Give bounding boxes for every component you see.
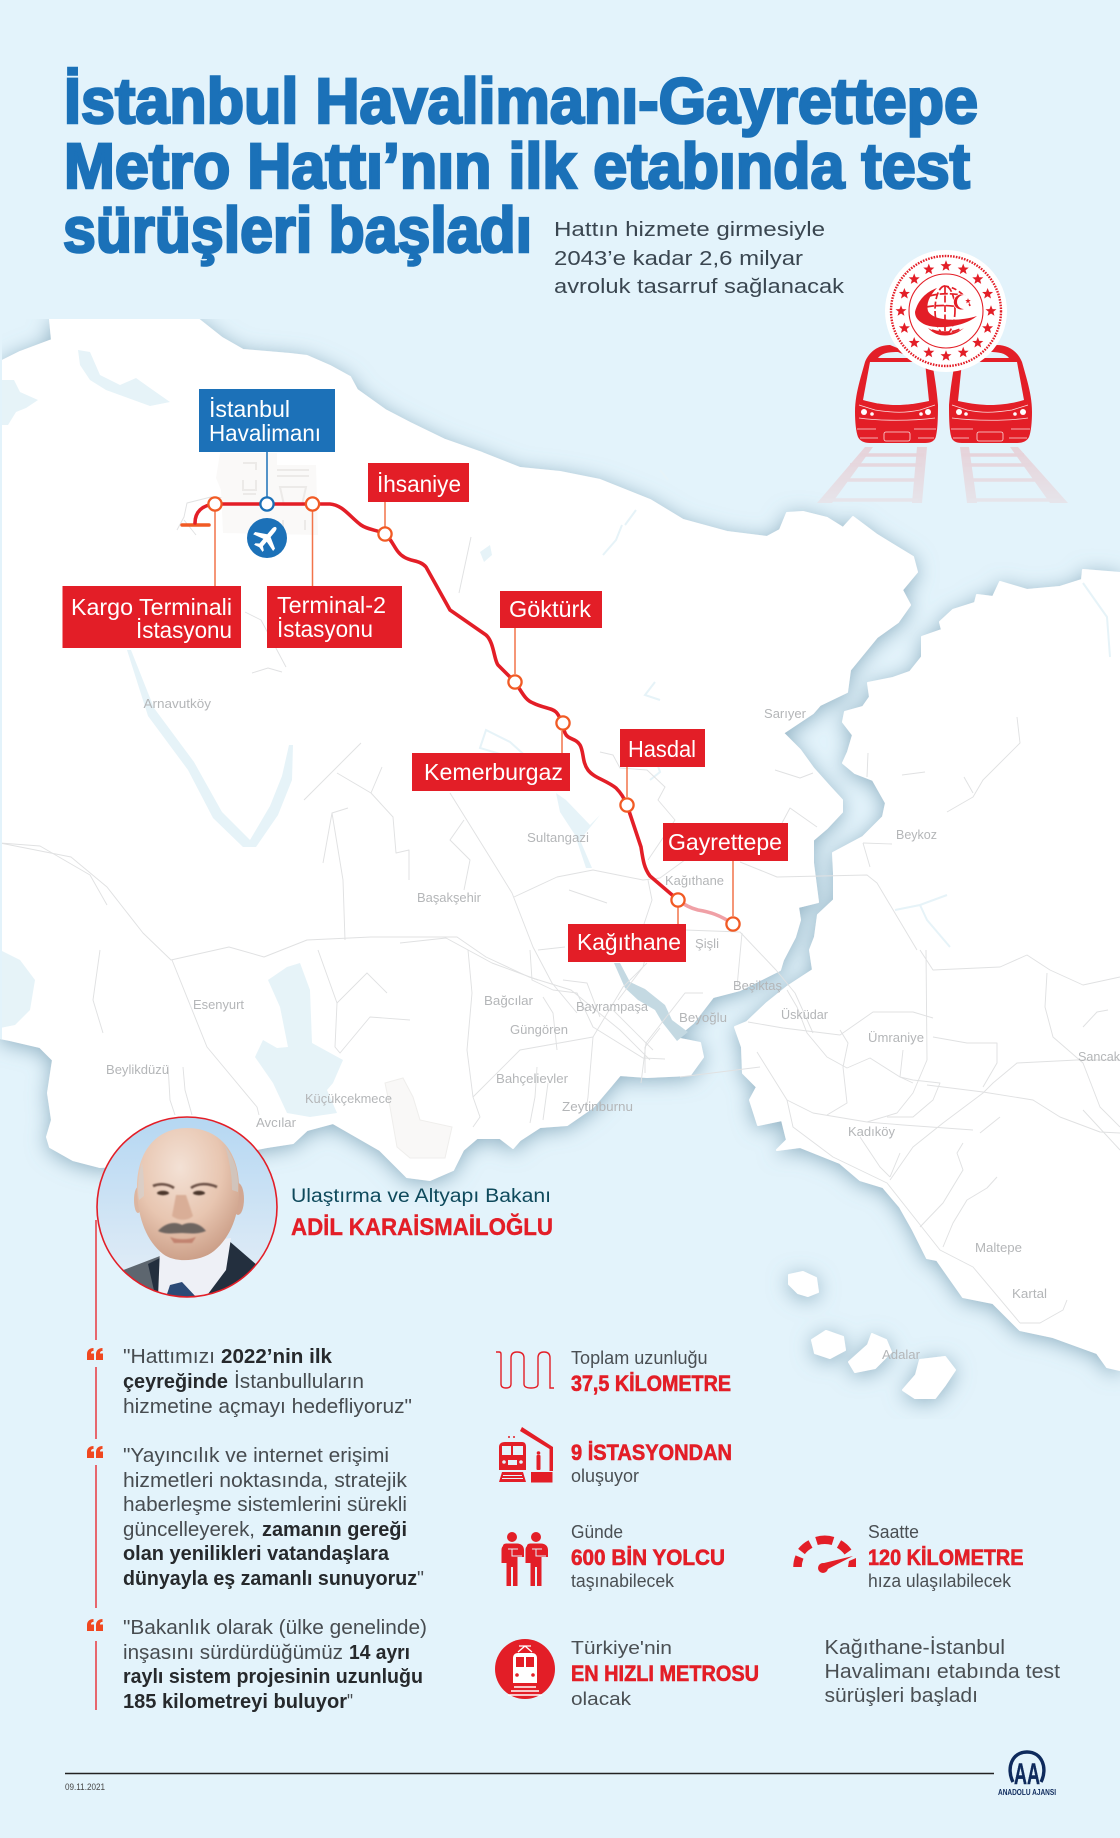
stat: daily passengers: taşınabilecek [571, 1571, 675, 1591]
minister caption [291, 1186, 553, 1241]
stat: fastest metro: olacak [571, 1689, 632, 1709]
stat: daily passengers [502, 1522, 725, 1591]
logo: Anadolu Ajansı [998, 1752, 1056, 1797]
title: sürüşleri başladı [63, 194, 532, 266]
label: Terminal-2 İstasyonu [267, 586, 402, 648]
quote 3: 185 kilometreyi buluyor [123, 1691, 347, 1713]
logo: Anadolu Ajansı: ANADOLU AJANSI [998, 1788, 1056, 1797]
place names [106, 697, 1120, 1362]
stat: total length [496, 1348, 731, 1396]
icon: airport plane [247, 518, 287, 558]
label: Hasdal [620, 729, 705, 767]
quote 2: haberleşme sistemlerini sürekli [123, 1494, 407, 1516]
quote mark 1 [87, 1348, 103, 1360]
minister caption: ADİL KARAİSMAİLOĞLU [291, 1213, 553, 1241]
quote 3 [87, 1617, 427, 1713]
side note [824, 1636, 1060, 1707]
quote 1: çeyreğinde [123, 1371, 228, 1393]
quote 1: "Hattımızı [123, 1346, 215, 1368]
place names: Küçükçekmece [305, 1092, 392, 1106]
stat: stations [499, 1427, 732, 1486]
stat: speed: 120 KİLOMETRE [868, 1545, 1024, 1570]
place names: Beykoz [896, 828, 937, 842]
quote 2: olan yenilikleri vatandaşlara [123, 1543, 390, 1565]
label: İhsaniye [368, 463, 469, 502]
place names: Maltepe [975, 1241, 1022, 1255]
stat: fastest metro [495, 1638, 759, 1709]
place names: Beşiktaş [733, 979, 782, 993]
quote 3: inşasını sürdürdüğümüz [123, 1642, 343, 1664]
roads [0, 497, 1120, 1323]
place names: Esenyurt [193, 998, 245, 1012]
logo: Anadolu Ajansı: AA [1014, 1758, 1040, 1791]
place names: Sultangazi [527, 831, 589, 845]
quote mark 2 [87, 1446, 103, 1458]
footer rule [65, 1772, 994, 1774]
stat: daily passengers: Günde [571, 1522, 623, 1542]
place names: Kartal [1012, 1287, 1047, 1301]
date: 09.11.2021 [65, 1782, 105, 1792]
label: Kağıthane [568, 924, 686, 962]
label: Kemerburgaz [412, 753, 570, 791]
label: Göktürk: Göktürk [509, 596, 592, 622]
label: Kargo Terminali İstasyonu [62, 586, 241, 648]
label: Gayrettepe [663, 823, 788, 861]
place names: Beyoğlu [679, 1011, 727, 1025]
side note: Kağıthane-İstanbul [824, 1636, 1005, 1659]
label: Kemerburgaz: Kemerburgaz [424, 759, 563, 785]
quote 2: " [417, 1568, 424, 1590]
subtitle: 2043’e kadar 2,6 milyar [554, 248, 803, 270]
label: Terminal-2 İstasyonu: Terminal-2 [277, 592, 386, 618]
place names: Arnavutköy [144, 697, 212, 711]
quote 1 [87, 1346, 412, 1418]
title: Metro Hattı’nın ilk etabında test [64, 130, 970, 202]
label: Hasdal: Hasdal [628, 736, 696, 762]
quote 1: 2022’nin ilk [221, 1346, 333, 1368]
subtitle: avroluk tasarruf sağlanacak [554, 276, 845, 298]
label: Kargo Terminali İstasyonu: Kargo Terminali [71, 594, 232, 620]
icon: left train [855, 345, 938, 443]
metro route line [182, 504, 733, 924]
place names: Sarıyer [764, 707, 806, 721]
stat: stations: oluşuyor [571, 1466, 639, 1486]
stat: fastest metro: EN HIZLI METROSU [571, 1661, 759, 1686]
place names: Şişli [695, 937, 719, 951]
place names: Başakşehir [417, 891, 481, 905]
label: Kargo Terminali İstasyonu: İstasyonu [136, 617, 232, 643]
quote 3: "Bakanlık olarak (ülke genelinde) [123, 1617, 427, 1639]
icon: winding line [496, 1352, 554, 1388]
icon: speedometer [798, 1540, 856, 1573]
quote 3: raylı sistem projesinin uzunluğu [123, 1666, 423, 1688]
label: İstanbul Havalimanı: Havalimanı [209, 420, 321, 446]
icon: metro badge [495, 1639, 555, 1699]
quote timeline [95, 1220, 97, 1710]
place names: Kağıthane [665, 874, 724, 888]
side note: Havalimanı etabında test [824, 1661, 1060, 1683]
label: İstanbul Havalimanı [199, 389, 335, 452]
place names: Bahçelievler [496, 1072, 568, 1086]
place names: Kadıköy [848, 1125, 896, 1139]
land masses [0, 319, 1120, 1398]
icon: station [499, 1427, 553, 1482]
quote 2: hizmetleri noktasında, stratejik [123, 1470, 408, 1492]
stat: speed [798, 1522, 1024, 1591]
icon: people [502, 1532, 548, 1586]
place names: Zeytinburnu [562, 1100, 633, 1114]
label: İstanbul Havalimanı: İstanbul [209, 396, 290, 422]
place names: Sancak [1078, 1050, 1120, 1064]
place names: Avcılar [256, 1116, 296, 1130]
label: İhsaniye: İhsaniye [377, 471, 461, 497]
place names: Adalar [882, 1348, 920, 1362]
quote 2: dünyayla eş zamanlı sunuyoruz [123, 1568, 417, 1590]
quote 3: " [347, 1691, 353, 1713]
place names: Bağcılar [484, 994, 533, 1008]
label: Kağıthane: Kağıthane [577, 929, 681, 955]
place names: Ümraniye [868, 1031, 924, 1045]
place names: Üsküdar [781, 1008, 828, 1022]
quote 3: 14 ayrı [349, 1642, 410, 1664]
stat: daily passengers: 600 BİN YOLCU [571, 1545, 725, 1570]
Golden Horn [614, 963, 688, 1041]
side note: sürüşleri başladı [824, 1685, 978, 1707]
quote 2 [87, 1445, 424, 1590]
stat: total length: 37,5 KİLOMETRE [571, 1371, 731, 1396]
label: Gayrettepe: Gayrettepe [668, 829, 782, 855]
thin left edge [0, 319, 2, 1039]
stat: fastest metro: Türkiye'nin [571, 1638, 672, 1658]
quote 1: İstanbulluların [234, 1370, 364, 1393]
label: Terminal-2 İstasyonu: İstasyonu [277, 616, 373, 642]
subtitle [554, 219, 845, 298]
minister portrait [97, 1117, 277, 1300]
title [63, 65, 978, 266]
minister caption: Ulaştırma ve Altyapı Bakanı [291, 1186, 551, 1207]
Ataturk airport footprint [385, 1078, 452, 1158]
icon: right train [949, 345, 1032, 443]
lakes and reservoirs [0, 350, 600, 1117]
icon: rails [817, 447, 1068, 503]
stat: stations: 9 İSTASYONDAN [571, 1440, 732, 1465]
quote mark 3 [87, 1619, 103, 1631]
quote 1: hizmetine açmayı hedefliyoruz" [123, 1396, 412, 1418]
place names: Bayrampaşa [576, 1000, 648, 1014]
station markers [208, 497, 740, 931]
stat: speed: hıza ulaşılabilecek [868, 1571, 1012, 1591]
map of Istanbul [0, 319, 1120, 1398]
subtitle: Hattın hizmete girmesiyle [554, 219, 825, 241]
title: İstanbul Havalimanı-Gayrettepe [64, 65, 978, 137]
icon: ministry seal [885, 250, 1007, 372]
label: Göktürk [500, 591, 602, 628]
Istanbul airport footprint [221, 462, 309, 530]
stat: total length: Toplam uzunluğu [571, 1348, 708, 1368]
quote 2: "Yayıncılık ve internet erişimi [123, 1445, 389, 1467]
station leader lines [215, 452, 733, 924]
quote 2: güncelleyerek, [123, 1519, 255, 1541]
stat: speed: Saatte [868, 1522, 919, 1542]
place names: Beylikdüzü [106, 1063, 169, 1077]
place names: Güngören [510, 1023, 568, 1037]
quote 2: zamanın gereği [262, 1519, 407, 1541]
